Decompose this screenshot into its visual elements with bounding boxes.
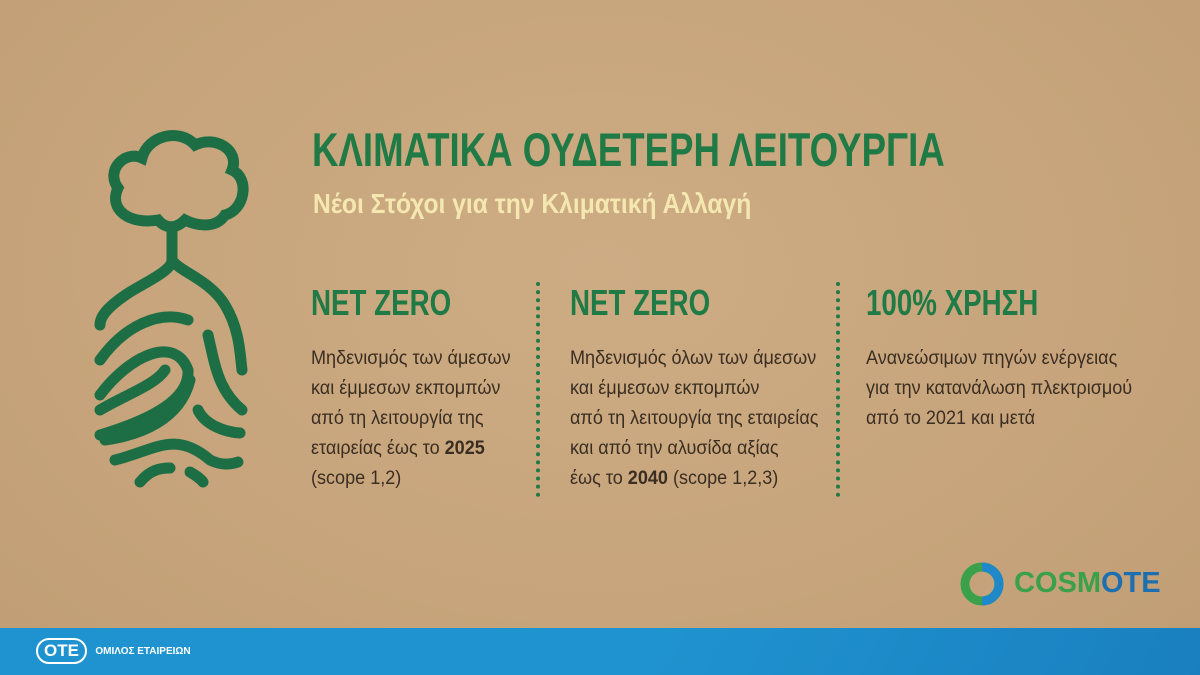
column 1 (311, 282, 511, 489)
logo: OTE: OTE (44, 641, 79, 660)
subtitle: Νέοι Στόχοι για την Κλιματική Αλλαγή (313, 188, 751, 219)
column 3: από το 2021 και μετά (866, 408, 1035, 429)
column 1: εταιρείας έως το 2025 (311, 438, 485, 459)
column 1: από τη λειτουργία της (311, 408, 484, 429)
logo: cosmote: COSMOTE (1014, 567, 1161, 599)
title: ΚΛΙΜΑΤΙΚΑ ΟΥΔΕΤΕΡΗ ΛΕΙΤΟΥΡΓΙΑ (312, 123, 945, 176)
column 2: έως το 2040 (scope 1,2,3) (570, 468, 778, 489)
icon: tree fingerprint (94, 130, 249, 488)
column 1: NET ZERO (311, 282, 451, 323)
column 2 (570, 282, 818, 489)
column 2: NET ZERO (570, 282, 710, 323)
column 2: Μηδενισμός όλων των άμεσων (570, 348, 816, 369)
logo: cosmote (960, 562, 1161, 606)
column 3: 100% ΧΡΗΣΗ (866, 282, 1038, 323)
column 1: και έμμεσων εκπομπών (311, 378, 500, 399)
column 2: και από την αλυσίδα αξίας (570, 438, 779, 459)
column 1: Μηδενισμός των άμεσων (311, 348, 511, 369)
column 2: από τη λειτουργία της εταιρείας (570, 408, 818, 429)
column 1: (scope 1,2) (311, 468, 401, 489)
footer band (0, 628, 1200, 675)
column 3 (866, 282, 1132, 429)
logo: OTE: ΟΜΙΛΟΣ ΕΤΑΙΡΕΙΩΝ (95, 646, 191, 657)
logo: OTE (36, 638, 191, 664)
column 3: για την κατανάλωση πλεκτρισμού (866, 378, 1132, 399)
column 3: Ανανεώσιμων πηγών ενέργειας (866, 348, 1117, 369)
column 2: και έμμεσων εκπομπών (570, 378, 759, 399)
